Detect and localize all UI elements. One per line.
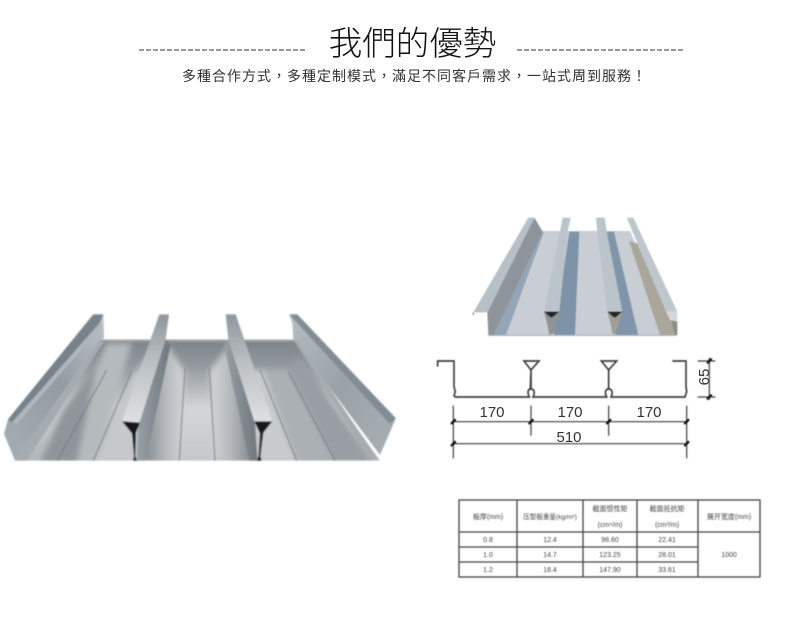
floor crease lines — [57, 368, 335, 461]
rib sections — [122, 421, 272, 461]
ribs — [122, 314, 272, 461]
table grid — [459, 500, 760, 577]
table header: 压型板重量(kg/m²) — [523, 512, 577, 521]
table header: 板厚(mm) — [473, 512, 503, 521]
table rows: 18.4 — [543, 567, 557, 574]
table header: 截面抵抗矩 — [650, 504, 684, 513]
table rows: 33.61 — [658, 567, 676, 574]
table rows: 12.4 — [543, 537, 557, 544]
table rows: 1000 — [721, 552, 737, 559]
profile outline — [438, 361, 687, 397]
rib sections — [544, 312, 622, 318]
table rows: 14.7 — [543, 552, 557, 559]
dimension labels: 170 — [636, 404, 662, 421]
floor — [10, 337, 387, 463]
table rows: 1.2 — [483, 567, 493, 574]
dimension ticks — [452, 359, 711, 445]
floor shading — [40, 343, 373, 463]
floor bands — [493, 232, 677, 335]
table rows: 22.41 — [658, 537, 676, 544]
left wall — [487, 218, 543, 335]
right wall — [627, 218, 677, 335]
left wall — [4, 314, 104, 461]
right wall — [289, 314, 396, 461]
table rows: 98.60 — [601, 537, 619, 544]
table rows: 147.90 — [599, 567, 621, 574]
dimension labels — [480, 369, 713, 446]
dimension labels: 170 — [558, 404, 582, 421]
title right dashes — [517, 49, 684, 51]
table header: (cm⁴/m) — [598, 522, 622, 529]
dimension drawing — [438, 358, 715, 458]
table header — [473, 504, 751, 529]
ribs — [544, 218, 622, 335]
table header: 截面惯性矩 — [592, 504, 628, 513]
subtitle: 多種合作方式，多種定制模式，滿足不同客戶需求，一站式周到服務！ — [182, 68, 647, 84]
dimension labels: 510 — [556, 429, 582, 446]
small decking photo — [473, 218, 677, 335]
table rows: 0.8 — [483, 537, 493, 544]
title left dashes — [139, 49, 305, 51]
table rows: 123.25 — [599, 552, 621, 559]
large decking photo — [4, 314, 396, 463]
table rows — [483, 537, 737, 574]
table header: (cm³/m) — [655, 522, 679, 529]
table rows: 1.0 — [483, 552, 493, 559]
dimension labels: 170 — [480, 404, 504, 421]
bottom edge — [488, 334, 677, 337]
title text: 我們的優勢 — [329, 26, 496, 63]
specification table — [459, 500, 760, 577]
table header: 展开宽度(mm) — [707, 512, 751, 521]
floor — [488, 231, 677, 335]
dimension lines — [453, 358, 715, 458]
table rows: 28.01 — [658, 552, 676, 559]
dimension labels: 65 — [696, 369, 713, 385]
